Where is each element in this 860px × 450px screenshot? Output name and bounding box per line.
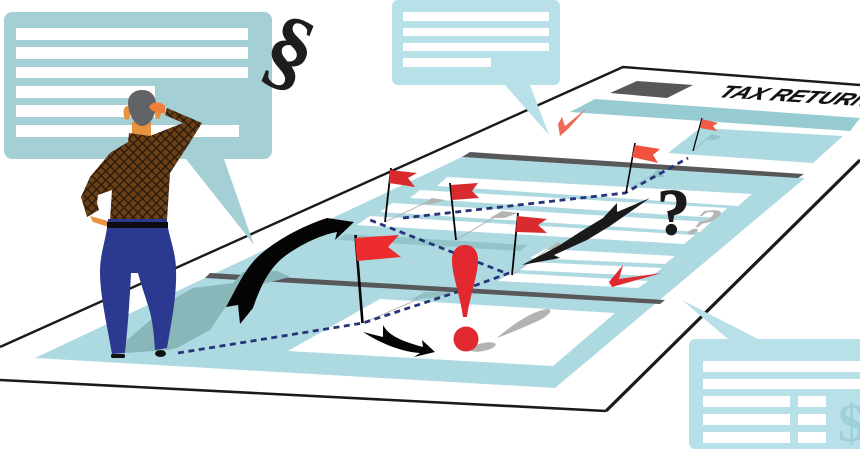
speech bubble: top [392, 0, 560, 135]
question mark shadow: ? [671, 202, 736, 242]
person: raised hand [149, 102, 165, 113]
person: confused man seen from behind [81, 90, 202, 358]
flag: far [626, 143, 660, 193]
speech bubble: right [682, 300, 860, 450]
red check mark: upper [558, 108, 587, 136]
exclamation mark [452, 245, 478, 352]
person: belt [107, 219, 168, 228]
form title block [610, 81, 693, 98]
person: trousers [100, 228, 176, 354]
person: neck and ears [124, 106, 161, 137]
person: shirt [81, 108, 202, 220]
flag: large [355, 235, 401, 323]
person: shoes [111, 350, 166, 358]
person shadow [125, 271, 290, 353]
form main section [35, 157, 805, 388]
speech bubble: left [4, 12, 272, 245]
flag: centre right [512, 213, 547, 275]
form top box [668, 128, 843, 163]
form divider bar: top [462, 152, 804, 178]
black curved arrow: up [226, 218, 354, 324]
form white rows [288, 177, 752, 366]
flag shadows [363, 134, 722, 323]
flag: farthest [693, 118, 718, 151]
person: hair [128, 90, 156, 126]
flag: centre [450, 183, 479, 240]
red check mark: lower [609, 265, 662, 287]
flag: left [385, 168, 417, 222]
black arrow: right [522, 198, 650, 265]
question mark: ? [657, 176, 690, 249]
black arrow: lower [363, 325, 435, 357]
paper: tax return form [0, 67, 860, 411]
dotted route [178, 158, 688, 353]
form header band [570, 99, 860, 131]
bar shadow [338, 234, 527, 251]
person: lower hand [90, 216, 109, 227]
exclamation shadow [469, 309, 550, 354]
form divider bar: lower [205, 273, 665, 304]
